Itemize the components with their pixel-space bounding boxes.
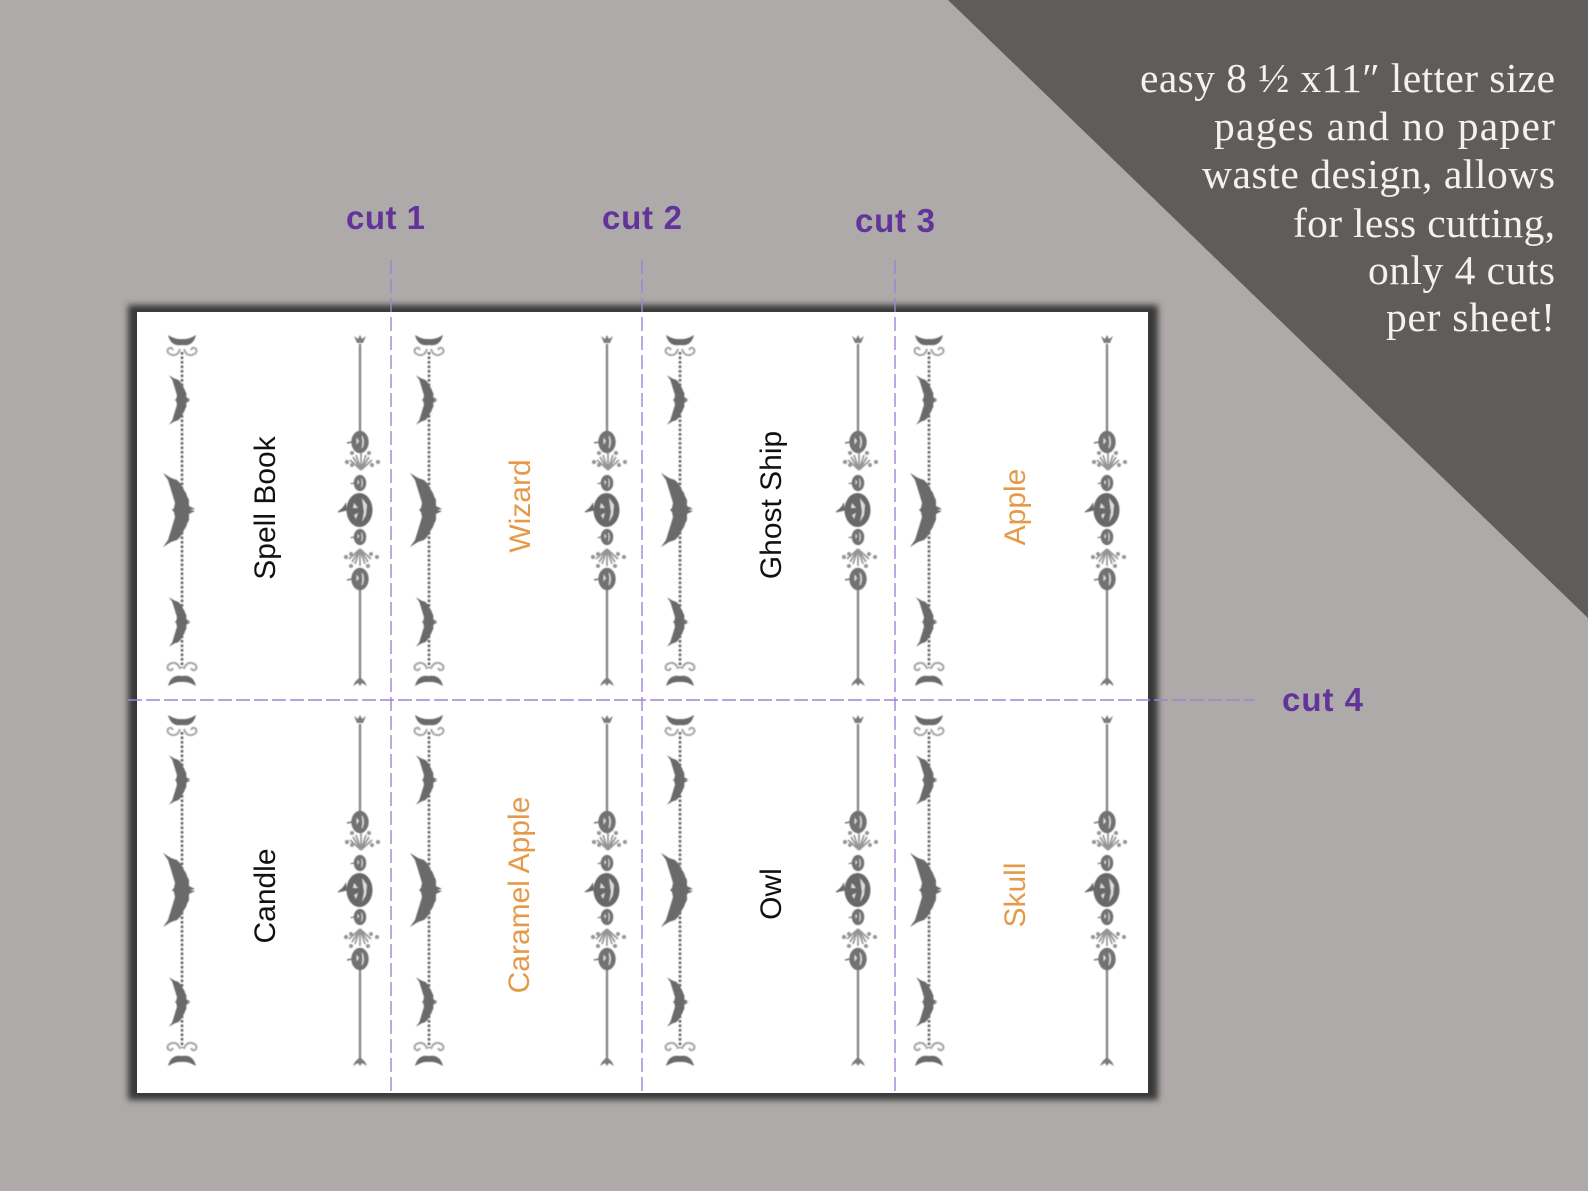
card: Caramel Apple — [410, 715, 626, 1066]
cut line 1 — [390, 260, 392, 1094]
pumpkin border — [836, 715, 877, 1066]
label: cut 3: cut 3 — [855, 202, 935, 239]
pumpkin border — [836, 335, 877, 686]
bat border — [163, 715, 196, 1066]
bat border — [163, 335, 196, 686]
card: Wizard — [410, 335, 626, 686]
card: Ghost Ship — [661, 335, 877, 686]
card: Apple — [910, 335, 1126, 686]
corner note text: only 4 cuts — [1368, 247, 1555, 293]
sheet drop shadow — [128, 305, 1158, 1100]
corner note text — [1140, 55, 1555, 340]
bat border — [910, 335, 944, 686]
bat border — [910, 715, 944, 1066]
cut line 2 — [641, 260, 643, 1094]
bat border — [661, 335, 694, 686]
pumpkin border — [585, 715, 626, 1066]
pumpkin border — [585, 335, 626, 686]
cut line 4 — [128, 699, 1255, 701]
label: Skull — [999, 862, 1032, 928]
card: Candle — [163, 715, 379, 1066]
bat border — [410, 715, 444, 1066]
label: Ghost Ship — [755, 431, 788, 579]
corner note text: pages and no paper — [1214, 103, 1555, 149]
pumpkin border — [338, 335, 379, 686]
label: cut 1: cut 1 — [346, 199, 425, 236]
label: Candle — [249, 848, 282, 944]
label: Spell Book — [249, 435, 282, 580]
label: Apple — [999, 469, 1032, 545]
label: Owl — [755, 868, 788, 920]
corner note text: for less cutting, — [1293, 200, 1555, 246]
label: cut 2: cut 2 — [602, 199, 682, 236]
label: Wizard — [504, 459, 537, 553]
card: Spell Book — [163, 335, 379, 686]
dark corner triangle — [948, 0, 1588, 618]
label: cut 4: cut 4 — [1282, 681, 1364, 718]
pumpkin border — [1085, 715, 1126, 1066]
cut line 3 — [894, 260, 896, 1094]
bat border — [410, 335, 444, 686]
white letter sheet — [137, 312, 1148, 1093]
bat border — [661, 715, 694, 1066]
pumpkin border — [338, 715, 379, 1066]
card: Owl — [661, 715, 877, 1066]
card: Skull — [910, 715, 1126, 1066]
corner note text: per sheet! — [1386, 294, 1555, 340]
pumpkin border — [1085, 335, 1126, 686]
corner note text: easy 8 ½ x11″ letter size — [1140, 55, 1555, 101]
label: Caramel Apple — [503, 797, 536, 993]
corner note text: waste design, allows — [1202, 151, 1555, 197]
